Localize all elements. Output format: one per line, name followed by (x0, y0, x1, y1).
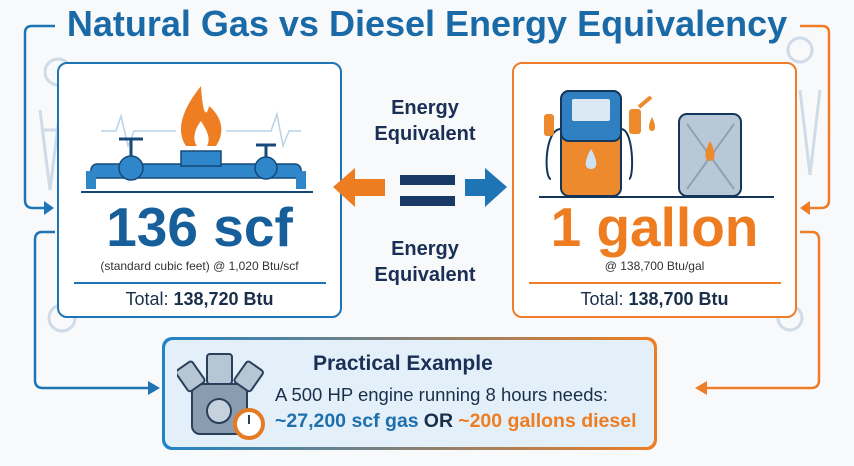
practical example box (162, 337, 657, 450)
subtext: @ 138,700 Btu/gal (605, 259, 704, 273)
icon: gas pipeline with flame (81, 86, 313, 193)
heading: practical example: Practical Example (313, 352, 493, 375)
label: energy equivalent bottom (374, 238, 476, 286)
value: 136 scf: 136 scf (106, 196, 293, 258)
label: energy equivalent bottom: Energy (391, 238, 459, 260)
label: energy equivalent top (374, 97, 476, 145)
panel: diesel (512, 62, 797, 318)
text: example: ~27,200 scf gas OR ~200 gallons diesel (275, 410, 636, 432)
equivalence arrows (333, 168, 507, 207)
title: Natural Gas vs Diesel Energy Equivalency (67, 3, 787, 44)
label: energy equivalent bottom: Equivalent (374, 264, 476, 286)
label: energy equivalent top: Energy (391, 97, 459, 119)
text: example: A 500 HP engine running 8 hours needs: (275, 384, 608, 405)
panel: natural gas (57, 62, 342, 318)
icon: engine with stopwatch (177, 353, 265, 440)
icon: fuel pump and jerry can (539, 90, 774, 198)
label: energy equivalent top: Equivalent (374, 123, 476, 145)
value: 1 gallon: 1 gallon (551, 196, 758, 258)
subtext: (standard cubic feet) @ 1,020 Btu/scf (100, 259, 299, 273)
total: Total: 138,720 Btu (125, 289, 274, 309)
total: Total: 138,700 Btu (580, 289, 729, 309)
text: example (275, 384, 636, 432)
